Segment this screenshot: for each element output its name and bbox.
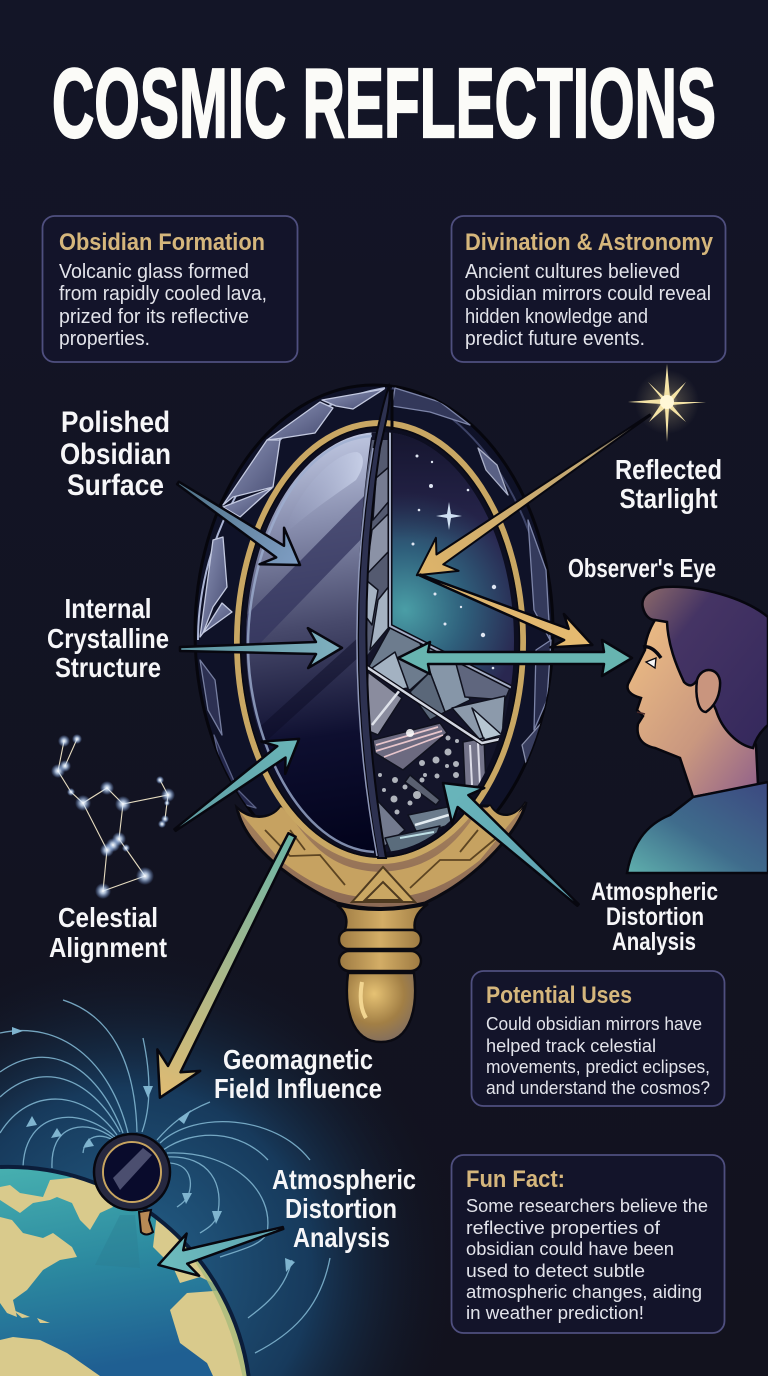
pink-striped crystal <box>373 723 486 788</box>
lower crystal bars <box>378 774 450 852</box>
label: internal crystalline structure: Structure <box>55 652 161 683</box>
label: atmospheric distortion analysis (left) <box>272 1164 416 1253</box>
ear <box>696 670 720 712</box>
label: polished obsidian surface: Obsidian <box>60 438 171 471</box>
label: atmospheric distortion analysis (left): Analysis <box>293 1222 390 1253</box>
panel: divination and astronomy: obsidian mirrors could reveal <box>465 283 711 305</box>
panel: divination and astronomy: hidden knowledge and <box>465 306 648 328</box>
panel: divination and astronomy <box>452 216 726 362</box>
crystal shards in upper seam <box>361 440 388 654</box>
shards between boundary lines <box>366 628 510 742</box>
label: celestial alignment: Alignment <box>49 932 167 963</box>
crystal boundary lines <box>362 430 520 743</box>
polished glass half <box>246 432 510 852</box>
label: geomagnetic field influence: Geomagnetic <box>223 1044 373 1075</box>
arrow: internal structure <box>180 628 342 669</box>
panel: fun fact: atmospheric changes, aiding <box>466 1282 702 1302</box>
label: atmospheric distortion analysis (right) <box>591 878 718 956</box>
panel: potential uses: Could obsidian mirrors have <box>486 1014 702 1034</box>
panel: fun fact: reflective properties of <box>466 1218 661 1238</box>
panel: divination and astronomy: predict future events. <box>465 328 645 350</box>
starfield section <box>368 432 514 746</box>
mirror rim <box>194 384 554 815</box>
label: celestial alignment: Celestial <box>58 902 158 933</box>
label: reflected starlight: Starlight <box>620 483 718 514</box>
arrow: atmospheric to Earth <box>152 1207 289 1286</box>
icon: constellation <box>51 734 175 899</box>
panel: fun fact: Some researchers believe the <box>466 1196 708 1216</box>
label: internal crystalline structure <box>47 593 169 683</box>
panel: obsidian formation: prized for its reflective <box>59 306 249 328</box>
arrow: starlight incoming <box>405 399 661 592</box>
icon: observer's head <box>627 587 768 873</box>
panel: divination and astronomy: Ancient cultures believed <box>465 261 680 283</box>
gold base crescent <box>237 802 526 908</box>
label: reflected starlight <box>615 454 722 514</box>
neck and face <box>628 620 758 797</box>
arrow: celestial alignment <box>163 723 311 846</box>
panel: fun fact <box>452 1155 724 1333</box>
illustration: Earth with magnetic field <box>0 1000 330 1376</box>
label: polished obsidian surface <box>60 406 171 502</box>
label: geomagnetic field influence: Field Influence <box>214 1073 382 1104</box>
globe <box>0 1167 249 1376</box>
hair <box>642 587 768 748</box>
icon: bright star <box>628 364 706 442</box>
arrow: polished surface <box>166 465 312 583</box>
panel: potential uses: movements, predict eclipses, <box>486 1057 710 1077</box>
label: internal crystalline structure: Crystalline <box>47 623 169 654</box>
label: internal crystalline structure: Internal <box>64 593 152 624</box>
shoulders <box>627 782 768 873</box>
arrow: double-headed eye link <box>398 640 632 676</box>
crystal speckles <box>378 736 459 814</box>
panel: potential uses: Potential Uses <box>486 982 632 1009</box>
central seam <box>358 386 390 858</box>
field lines <box>0 1000 330 1353</box>
label: atmospheric distortion analysis (right): Analysis <box>612 928 696 956</box>
illustration: obsidian mirror <box>195 385 553 1042</box>
panel: fun fact: in weather prediction! <box>466 1303 644 1323</box>
panel: potential uses: helped track celestial <box>486 1036 656 1056</box>
continents <box>0 1173 250 1376</box>
crystal section <box>359 432 510 852</box>
arrow: reflected to eye <box>413 558 599 662</box>
inner steel rim <box>248 436 374 852</box>
panel: obsidian formation: from rapidly cooled lava, <box>59 283 267 305</box>
label: atmospheric distortion analysis (right): Distortion <box>606 903 704 931</box>
arrow: atmospheric analysis <box>427 765 594 923</box>
panel: potential uses <box>472 971 724 1106</box>
background glow around Earth <box>0 940 470 1376</box>
panel: obsidian formation: Volcanic glass formed <box>59 261 249 283</box>
panel: obsidian formation: properties. <box>59 328 150 350</box>
panel: obsidian formation: Obsidian Formation <box>59 229 265 256</box>
panel: potential uses: and understand the cosmos? <box>486 1078 710 1098</box>
brow and eye <box>643 647 661 658</box>
panel: divination and astronomy: Divination & Astronomy <box>465 229 714 256</box>
handle <box>337 904 428 1042</box>
panel: fun fact: Fun Fact: <box>466 1166 565 1193</box>
label: polished obsidian surface: Surface <box>67 469 164 502</box>
field arrowheads <box>12 1027 295 1272</box>
label: atmospheric distortion analysis (left): Atmospheric <box>272 1164 416 1195</box>
miniature mirror <box>94 1134 170 1234</box>
arrow: geomagnetic field <box>138 824 313 1108</box>
panel: obsidian formation <box>42 216 298 362</box>
label: reflected starlight: Reflected <box>615 454 722 485</box>
label: observer's eye: Observer's Eye <box>568 553 716 583</box>
label: atmospheric distortion analysis (left): Distortion <box>285 1193 397 1224</box>
label: celestial alignment <box>49 902 167 963</box>
label: polished obsidian surface: Polished <box>61 406 170 439</box>
gold ring <box>237 423 523 861</box>
label: atmospheric distortion analysis (right): Atmospheric <box>591 878 718 906</box>
panel: fun fact: obsidian could have been <box>466 1239 674 1259</box>
panel: fun fact: used to detect subtle <box>466 1261 645 1281</box>
label: geomagnetic field influence <box>214 1044 382 1104</box>
